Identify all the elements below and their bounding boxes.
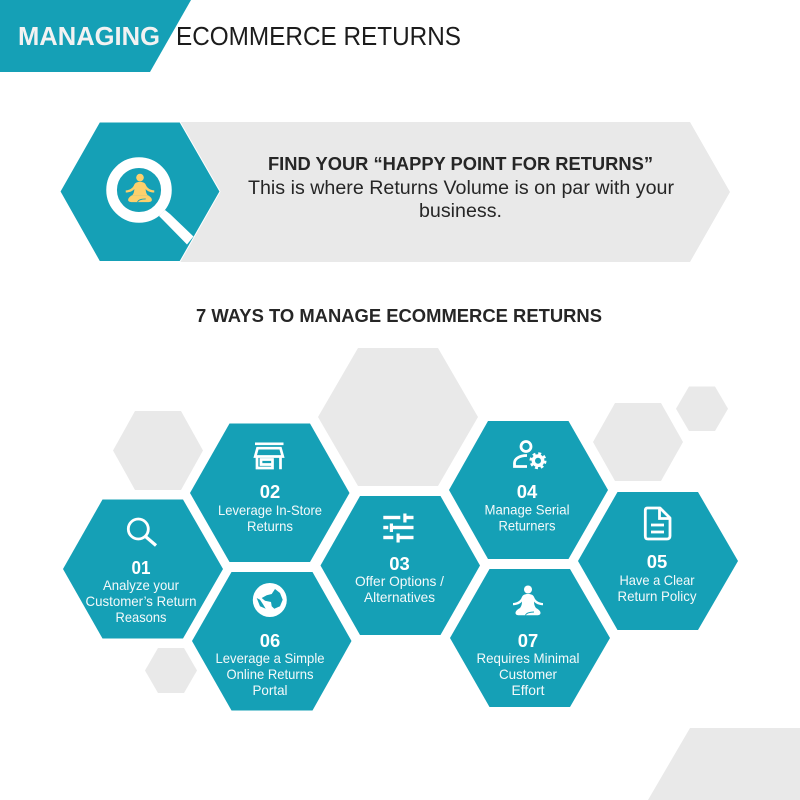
icon: person with gear: [514, 442, 545, 468]
panel: way 04: [449, 421, 608, 559]
text 06: Portal: [252, 682, 288, 698]
number 03: 03: [389, 553, 410, 574]
happy point description: This is where Returns Volume is on par with your: [248, 178, 675, 199]
happy point description: [248, 178, 675, 222]
number 01: 01: [132, 557, 150, 578]
background hexagons: [113, 348, 800, 800]
text 04: Returners: [498, 518, 556, 534]
text 04: [484, 502, 570, 534]
text 03: Offer Options /: [355, 573, 444, 589]
number 06: 06: [260, 630, 280, 651]
icon: globe: [253, 583, 287, 617]
panel: way 06: [192, 572, 352, 710]
text 02: Returns: [247, 518, 293, 534]
panel: way 03: [320, 496, 480, 635]
text 02: [218, 502, 322, 534]
arrow banner: [180, 122, 730, 262]
icon: meditating figure: [513, 586, 543, 615]
text 06: Online Returns: [226, 666, 314, 682]
text 05: Return Policy: [618, 588, 696, 604]
number 07: 07: [518, 630, 538, 651]
title: ecommerce returns: ECOMMERCE RETURNS: [176, 21, 461, 51]
icon: store: [255, 442, 284, 469]
text 06: Leverage a Simple: [216, 650, 325, 666]
number 04: 04: [517, 481, 538, 502]
text 01: Customer’s Return: [86, 593, 196, 609]
section heading: 7 WAYS TO MANAGE ECOMMERCE RETURNS: [196, 306, 602, 326]
happy point heading: FIND YOUR “HAPPY POINT FOR RETURNS”: [268, 153, 653, 174]
text 01: [86, 577, 196, 625]
teal hexagon: [60, 122, 220, 262]
text 05: Have a Clear: [620, 572, 695, 588]
text 04: Manage Serial: [484, 502, 570, 518]
number 05: 05: [647, 551, 667, 572]
panel: way 05: [578, 492, 738, 630]
title: managing: MANAGING: [18, 21, 160, 51]
icon: magnifier: [128, 519, 156, 546]
banner shape: [0, 0, 191, 72]
text 05: [618, 572, 696, 604]
text 02: Leverage In-Store: [218, 502, 322, 518]
panel: happy point: [60, 122, 730, 262]
text 07: Requires Minimal: [476, 650, 580, 666]
panel: way 01: [63, 500, 223, 638]
text 03: Alternatives: [364, 589, 435, 605]
icon: document: [645, 508, 670, 539]
text 01: Analyze your: [103, 577, 179, 593]
text 07: [476, 650, 580, 698]
panel: way 07: [450, 569, 610, 707]
text 03: [355, 573, 444, 605]
text 06: [216, 650, 325, 698]
icon: magnifier with meditating figure: [112, 163, 194, 244]
happy point description: business.: [419, 201, 502, 222]
text 07: Effort: [512, 682, 545, 698]
text 07: Customer: [499, 666, 557, 682]
panel: way 02: [190, 424, 350, 562]
text 01: Reasons: [116, 609, 166, 625]
header banner: [0, 0, 461, 72]
icon: sliders: [383, 514, 414, 542]
number 02: 02: [260, 481, 280, 502]
